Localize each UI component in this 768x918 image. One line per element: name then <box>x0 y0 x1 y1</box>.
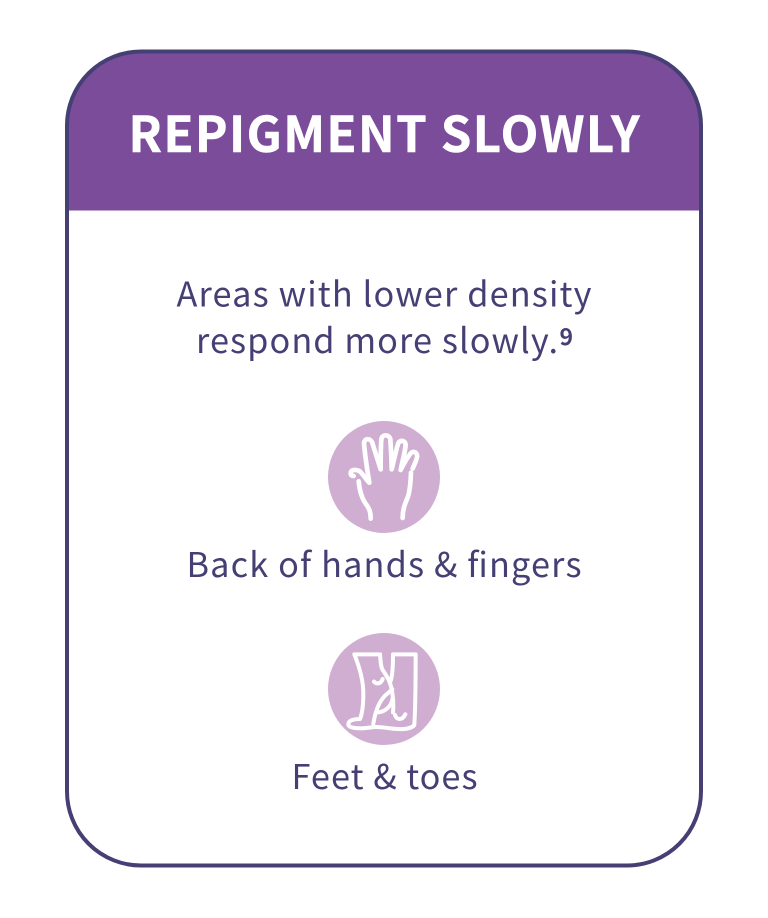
text block: intro: respond more slowly. <box>196 313 558 363</box>
card background <box>67 52 701 866</box>
card header band <box>67 52 701 210</box>
heading: REPIGMENT SLOWLY <box>128 96 640 167</box>
label: feet and toes: Feet & toes <box>292 749 478 799</box>
icon: hand <box>328 421 440 533</box>
card border <box>67 52 701 866</box>
panel: repigment slowly card <box>67 52 701 866</box>
icon: feet <box>328 633 440 745</box>
text block: intro: Areas with lower density <box>176 266 592 316</box>
text block: intro <box>176 266 592 363</box>
text block: intro: 9 <box>560 318 573 352</box>
label: back of hands and fingers: Back of hands & fingers <box>186 537 582 587</box>
